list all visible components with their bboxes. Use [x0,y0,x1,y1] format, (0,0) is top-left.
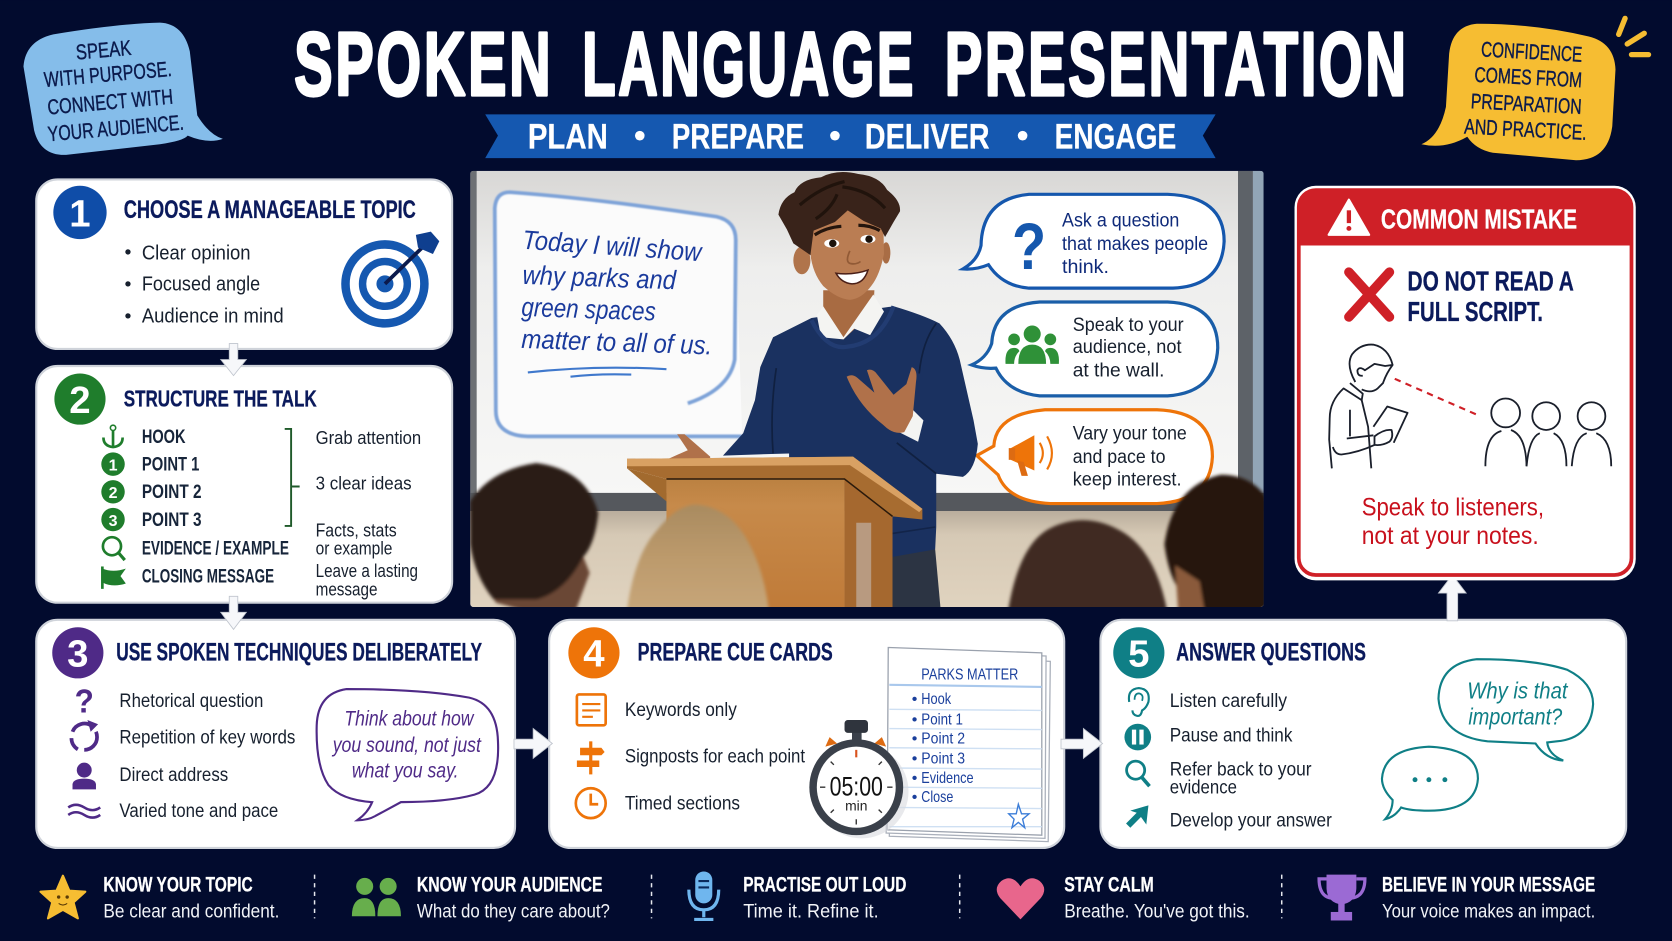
speech: speak to audience: at the wall. [1073,361,1164,382]
resting hand [669,434,710,460]
callout: think about how you sound: Think about how [344,706,475,730]
answer list: Refer back to your [1170,759,1312,780]
technique icons: ? [75,684,94,721]
callout: confidence: AND PRACTICE. [1464,115,1587,145]
cue card list: Signposts for each point [625,747,806,768]
advice text: not at your notes. [1362,523,1539,550]
title: LANGUAGE [582,14,916,114]
whiteboard [470,171,1264,607]
callout: why is that important [1438,659,1593,761]
badge 3: 3 [67,633,89,676]
badge 2: 2 [69,379,91,422]
badge 4 [568,627,620,678]
outline icons: 2 [109,485,118,502]
bullet list [125,242,284,327]
speech: vary tone: Vary your tone [1073,424,1187,445]
title: SPOKEN [294,14,553,114]
outline icons: 3 [109,513,118,530]
outline icons: 1 [109,458,118,475]
outline notes [316,428,421,599]
warning text: DO NOT READ A [1408,265,1574,296]
speech: vary tone: keep interest. [1073,469,1181,490]
callout: speak with purpose: CONNECT WITH [46,85,174,120]
callout: think about how you sound [317,689,498,820]
callout: speak with purpose [23,23,223,155]
callout: why is that important: important? [1468,703,1562,729]
header bar: COMMON MISTAKE [1381,203,1577,234]
cue card list [625,700,806,815]
photo: student presenting [470,171,1269,613]
badge 1 [53,186,107,239]
header bar [1299,190,1631,246]
outline items: POINT 2 [142,482,202,503]
face [810,203,884,300]
cue card stack: • [912,751,917,768]
speech: vary tone [977,410,1212,504]
cue card stack: Evidence [921,770,974,787]
icon: stopwatch [809,720,909,838]
title: PRESENTATION [945,14,1409,114]
technique list: Direct address [119,765,228,786]
whiteboard note: green spaces [521,292,656,327]
heading: USE SPOKEN TECHNIQUES DELIBERATELY [116,639,482,666]
advice text [1362,494,1544,550]
tip: stay calm [997,873,1250,922]
outline items: EVIDENCE / EXAMPLE [142,539,289,560]
callout: think about how you sound: what you say. [352,759,459,783]
speech: speak to audience [971,302,1218,396]
outline notes: Facts, stats [316,521,397,541]
technique list: Repetition of key words [119,727,295,748]
tip: practise out loud [689,871,906,922]
outline icons [101,425,126,589]
tip: believe in your message [1319,873,1595,922]
cue card stack: • [912,711,917,728]
arrow: step 4 to 5 [1061,729,1103,758]
tip: stay calm: Breathe. You've got this. [1064,901,1250,922]
banner: plan prepare deliver engage: DELIVER [865,117,990,156]
illustration: reader and audience [1329,345,1611,468]
hair [778,172,900,255]
callout: speak with purpose: WITH PURPOSE. [43,57,173,92]
tip: know your topic: Be clear and confident. [103,901,279,922]
badge 2 [54,373,106,425]
heading: PREPARE CUE CARDS [638,639,833,666]
whiteboard note: why parks and [522,260,678,295]
trousers [893,549,940,608]
heading: ANSWER QUESTIONS [1176,639,1366,666]
outline notes: 3 clear ideas [316,474,412,494]
speech: vary tone: and pace to [1073,447,1165,468]
speech: ask a question [963,194,1224,288]
speech: ask a question: ? [1012,210,1046,284]
answer icons [1124,688,1151,828]
badge 5: 5 [1128,633,1150,676]
tip: practise out loud: Time it. Refine it. [743,901,879,922]
cue card stack: Hook [921,691,952,708]
callout: thinking dots [1382,747,1478,819]
whiteboard note: matter to all of us. [521,324,713,361]
bullet list: Clear opinion [142,242,251,264]
tip: practise out loud: PRACTISE OUT LOUD [743,873,906,897]
cue card stack: Point 2 [921,730,965,747]
bullet list: Audience in mind [142,305,284,327]
neck [823,290,874,339]
icon: stopwatch: 05:00 [830,772,883,802]
audience heads [470,463,1269,613]
callout: think about how you sound: you sound, not just [331,733,482,757]
cue card stack: Point 1 [921,711,963,728]
outline notes: message [316,579,377,599]
callout: confidence [1421,18,1649,160]
answer list: evidence [1170,778,1237,799]
cue card stack: • [912,730,917,747]
tip: know your audience: KNOW YOUR AUDIENCE [417,873,602,897]
technique icons [68,684,100,818]
student presenter [669,172,978,608]
callout: why is that important: Why is that [1467,678,1569,704]
speech: ask a question: that makes people [1062,234,1208,255]
technique list: Varied tone and pace [119,801,278,822]
arrow: step 5 to common mistake [1438,575,1466,621]
callout: confidence: PREPARATION [1470,89,1582,119]
cue card stack: • [912,691,917,708]
sweater [723,306,978,557]
badge 4: 4 [583,633,605,676]
arrow: step 3 to 4 [514,729,552,758]
icon: stopwatch: min [845,798,867,814]
raised hand [900,410,924,442]
panel: step 5 answer questions [1100,620,1626,848]
tip: know your topic: KNOW YOUR TOPIC [103,873,253,897]
tip: know your audience [352,873,610,922]
badge 1: 1 [69,192,91,235]
arrow: step 2 to 3 [221,596,246,629]
cue card list: Keywords only [625,700,737,721]
outline notes: or example [316,539,392,559]
bracket [285,429,300,526]
outline items: POINT 1 [142,455,200,476]
collar [817,295,884,339]
cue card stack: • [912,770,917,787]
cue card stack [886,648,1050,842]
cue card stack: Point 3 [921,751,965,768]
cue card icons [576,694,606,818]
title [294,14,1409,114]
heading: CHOOSE A MANAGEABLE TOPIC [124,197,416,224]
outline items [142,427,289,587]
footer strip [41,871,1595,922]
banner: plan prepare deliver engage: PREPARE [672,117,804,156]
technique list: Rhetorical question [119,691,263,712]
bullet list: Focused angle [142,273,260,295]
tip: believe in your message: Your voice makes an impact. [1382,901,1595,922]
panel: step 4 cue cards [549,620,1064,848]
panel: step 1 choose topic [36,179,452,349]
callout: confidence: CONFIDENCE [1480,37,1583,67]
outline notes: Grab attention [316,428,421,448]
speech: speak to audience: Speak to your [1073,315,1184,336]
answer list: Pause and think [1170,725,1293,746]
badge 3 [52,627,103,678]
banner: plan prepare deliver engage: ENGAGE [1055,117,1176,156]
speech: ask a question: think. [1062,257,1109,278]
callout: speak with purpose: SPEAK [75,36,132,65]
outline items: POINT 3 [142,510,202,531]
arrow: step 1 to 2 [221,344,246,376]
panel: step 2 structure [36,366,452,603]
whiteboard note: Today I will show [521,225,704,267]
technique list [119,691,295,822]
callout: confidence: COMES FROM [1474,63,1583,92]
tip: know your topic [41,873,279,922]
icon: red cross [1349,272,1389,317]
cue card list: Timed sections [625,794,740,815]
answer list: Listen carefully [1170,691,1287,712]
panel: common mistake [1295,186,1636,580]
callout: speak with purpose: YOUR AUDIENCE. [47,111,185,146]
tip: stay calm: STAY CALM [1064,873,1154,897]
whiteboard note [495,192,742,436]
outline items: HOOK [142,427,186,448]
cue card stack: • [912,789,917,806]
banner: plan prepare deliver engage [485,114,1216,158]
heading: STRUCTURE THE TALK [124,386,317,412]
cue card stack: Close [921,789,953,806]
tip: believe in your message: BELIEVE IN YOUR MESSAGE [1382,873,1595,897]
ears [793,247,810,274]
warning text: FULL SCRIPT. [1408,296,1543,327]
lectern [627,457,922,612]
warning text [1408,265,1574,327]
panel: step 3 techniques [36,620,515,848]
banner: plan prepare deliver engage: PLAN [528,117,608,156]
cue card stack: PARKS MATTER [921,667,1018,684]
outline notes: Leave a lasting [316,561,418,581]
answer list [1170,691,1332,832]
icon: target [345,232,439,323]
tip: know your audience: What do they care about? [417,901,610,922]
facial features [815,225,880,235]
answer list: Develop your answer [1170,811,1332,832]
badge 5 [1113,627,1164,678]
outline items: CLOSING MESSAGE [142,566,274,587]
advice text: Speak to listeners, [1362,494,1544,521]
speech: speak to audience: audience, not [1073,337,1182,358]
speech: ask a question: Ask a question [1062,210,1179,231]
